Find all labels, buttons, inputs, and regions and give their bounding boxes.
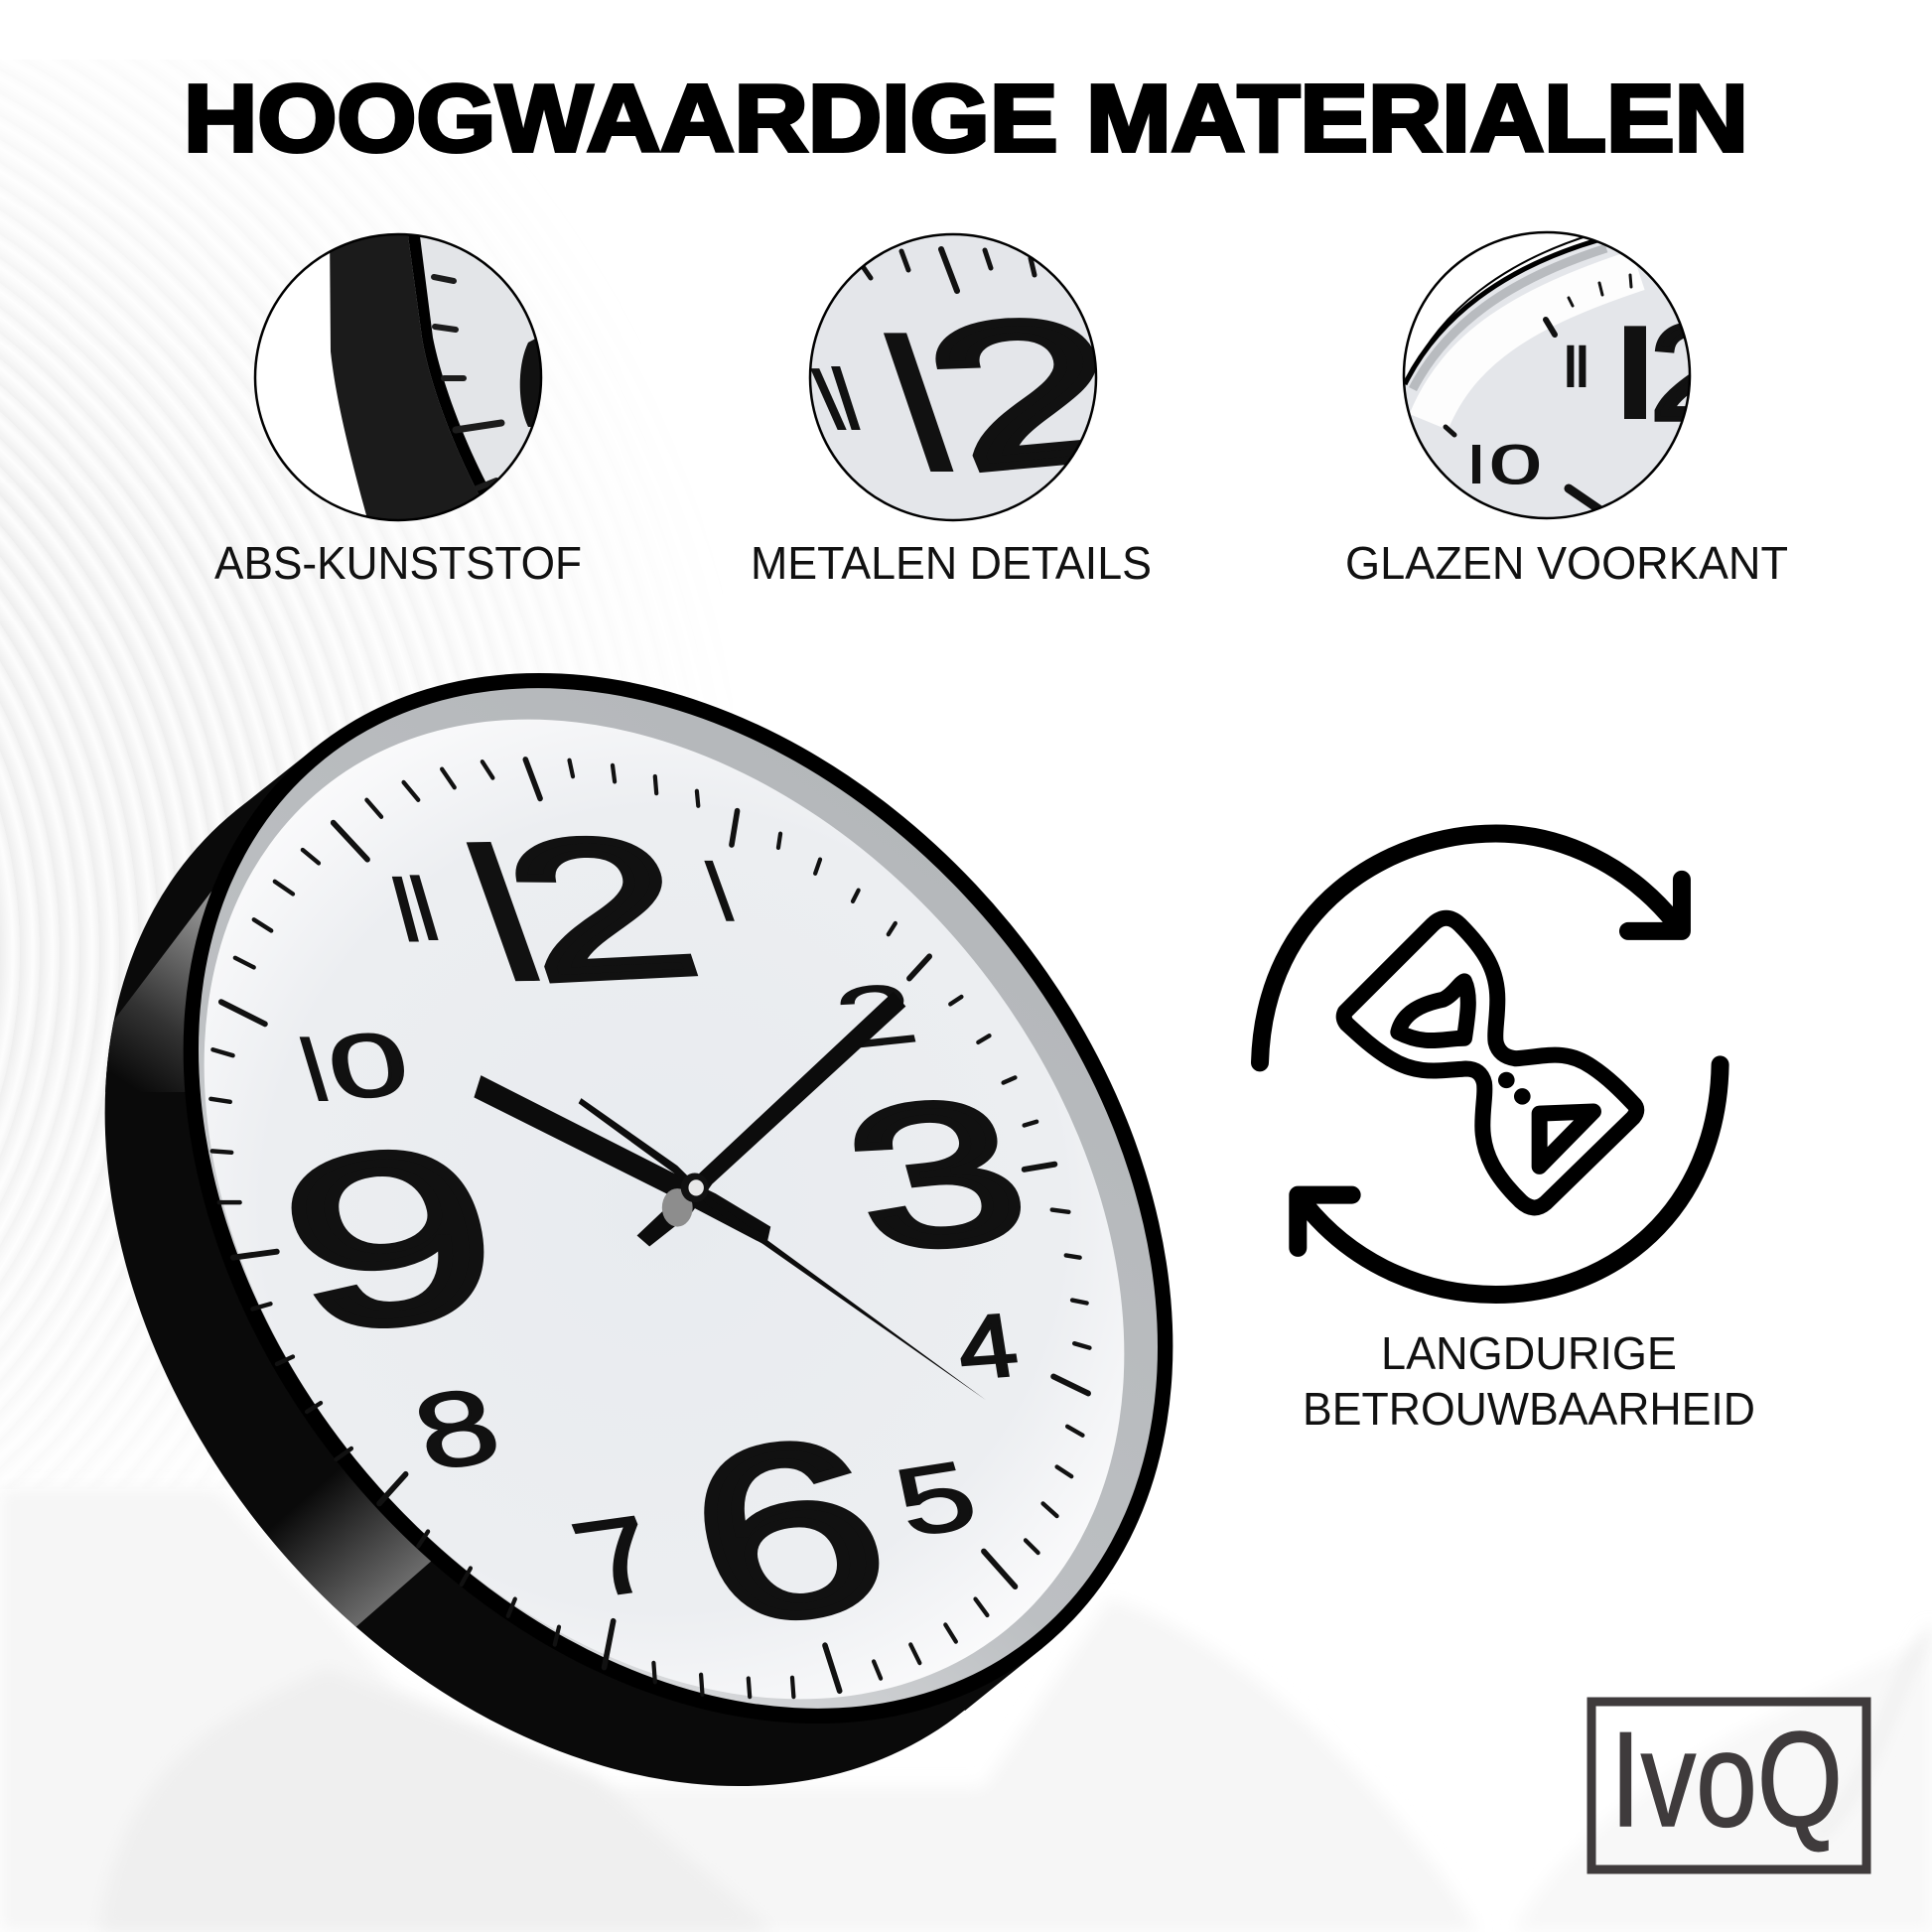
second hand	[579, 1098, 986, 1400]
clock numerals: 0	[320, 1014, 417, 1119]
thumbnail: glass front close-up: 0	[1489, 433, 1542, 495]
clock numerals: 4	[950, 1295, 1024, 1398]
black bezel ring	[0, 478, 1377, 1919]
panel: metalen details	[751, 234, 1168, 589]
clock numerals: 1	[382, 856, 463, 961]
thumbnail: glass front close-up: 1	[1577, 298, 1687, 448]
hourglass	[1344, 918, 1636, 1207]
hour hand	[474, 1075, 770, 1246]
silver inner ring	[1, 499, 1355, 1897]
logo: IvoQ	[1610, 1704, 1843, 1855]
clock numerals: 2	[481, 795, 720, 1022]
clock numerals: 6	[663, 1387, 912, 1677]
clock numerals: 3	[825, 1056, 1048, 1294]
clock hands	[474, 992, 986, 1400]
label: langdurige betrouwbaarheid: BETROUWBAARHEID	[1303, 1383, 1755, 1435]
thumbnail: clock case close-up	[255, 228, 556, 526]
clock numerals: 8	[401, 1365, 511, 1492]
clock numerals: 1	[272, 1017, 352, 1121]
thumbnail: numeral twelve close-up	[808, 232, 1098, 522]
panel: ABS-kunststof	[214, 228, 582, 589]
minute ticks	[210, 759, 1090, 1697]
thumbnail: glass front close-up: 1	[1455, 433, 1495, 495]
label: ABS-KUNSTSTOF	[214, 537, 582, 589]
minute hand	[637, 992, 905, 1247]
dial details	[210, 759, 1090, 1697]
label: METALEN DETAILS	[751, 537, 1152, 589]
clock numerals: 7	[558, 1494, 678, 1619]
top arrow	[1260, 834, 1682, 1062]
thumbnail: glass front close-up: 2	[1650, 297, 1732, 448]
clock numerals: 1	[679, 842, 758, 940]
icon: hourglass with circular arrows	[1260, 834, 1721, 1295]
label: GLAZEN VOORKANT	[1345, 537, 1788, 589]
clock case	[105, 750, 1042, 1786]
clock dial	[15, 538, 1313, 1880]
thumbnail: numeral twelve close-up: 2	[894, 274, 1168, 512]
thumbnail: glass front close-up: 1	[1552, 333, 1587, 401]
thumbnail: glass front close-up	[1402, 230, 1692, 520]
thumbnail: glass front close-up: 1	[1564, 333, 1599, 401]
clock numerals	[260, 795, 1048, 1677]
label: langdurige betrouwbaarheid: LANGDURIGE	[1381, 1327, 1677, 1379]
thumbnail: numeral twelve close-up: 1	[782, 350, 872, 450]
bottom arrow	[1298, 1064, 1721, 1295]
hub	[662, 1173, 709, 1227]
title: HOOGWAARDIGE MATERIALEN	[184, 66, 1748, 172]
clock	[105, 673, 1173, 1786]
thumbnail: numeral twelve close-up: 1	[819, 289, 1011, 514]
label: langdurige betrouwbaarheid	[1303, 1327, 1755, 1435]
clock numerals: 9	[260, 1095, 521, 1381]
clock numerals: 1	[365, 856, 443, 962]
panel: glazen voorkant	[1345, 228, 1788, 589]
clock numerals: 1	[397, 797, 602, 1026]
thumbnail: numeral twelve close-up: 1	[805, 346, 884, 451]
background waves	[0, 1489, 1932, 1932]
clock numerals: 5	[884, 1441, 988, 1557]
clock numerals: 2	[826, 965, 926, 1067]
